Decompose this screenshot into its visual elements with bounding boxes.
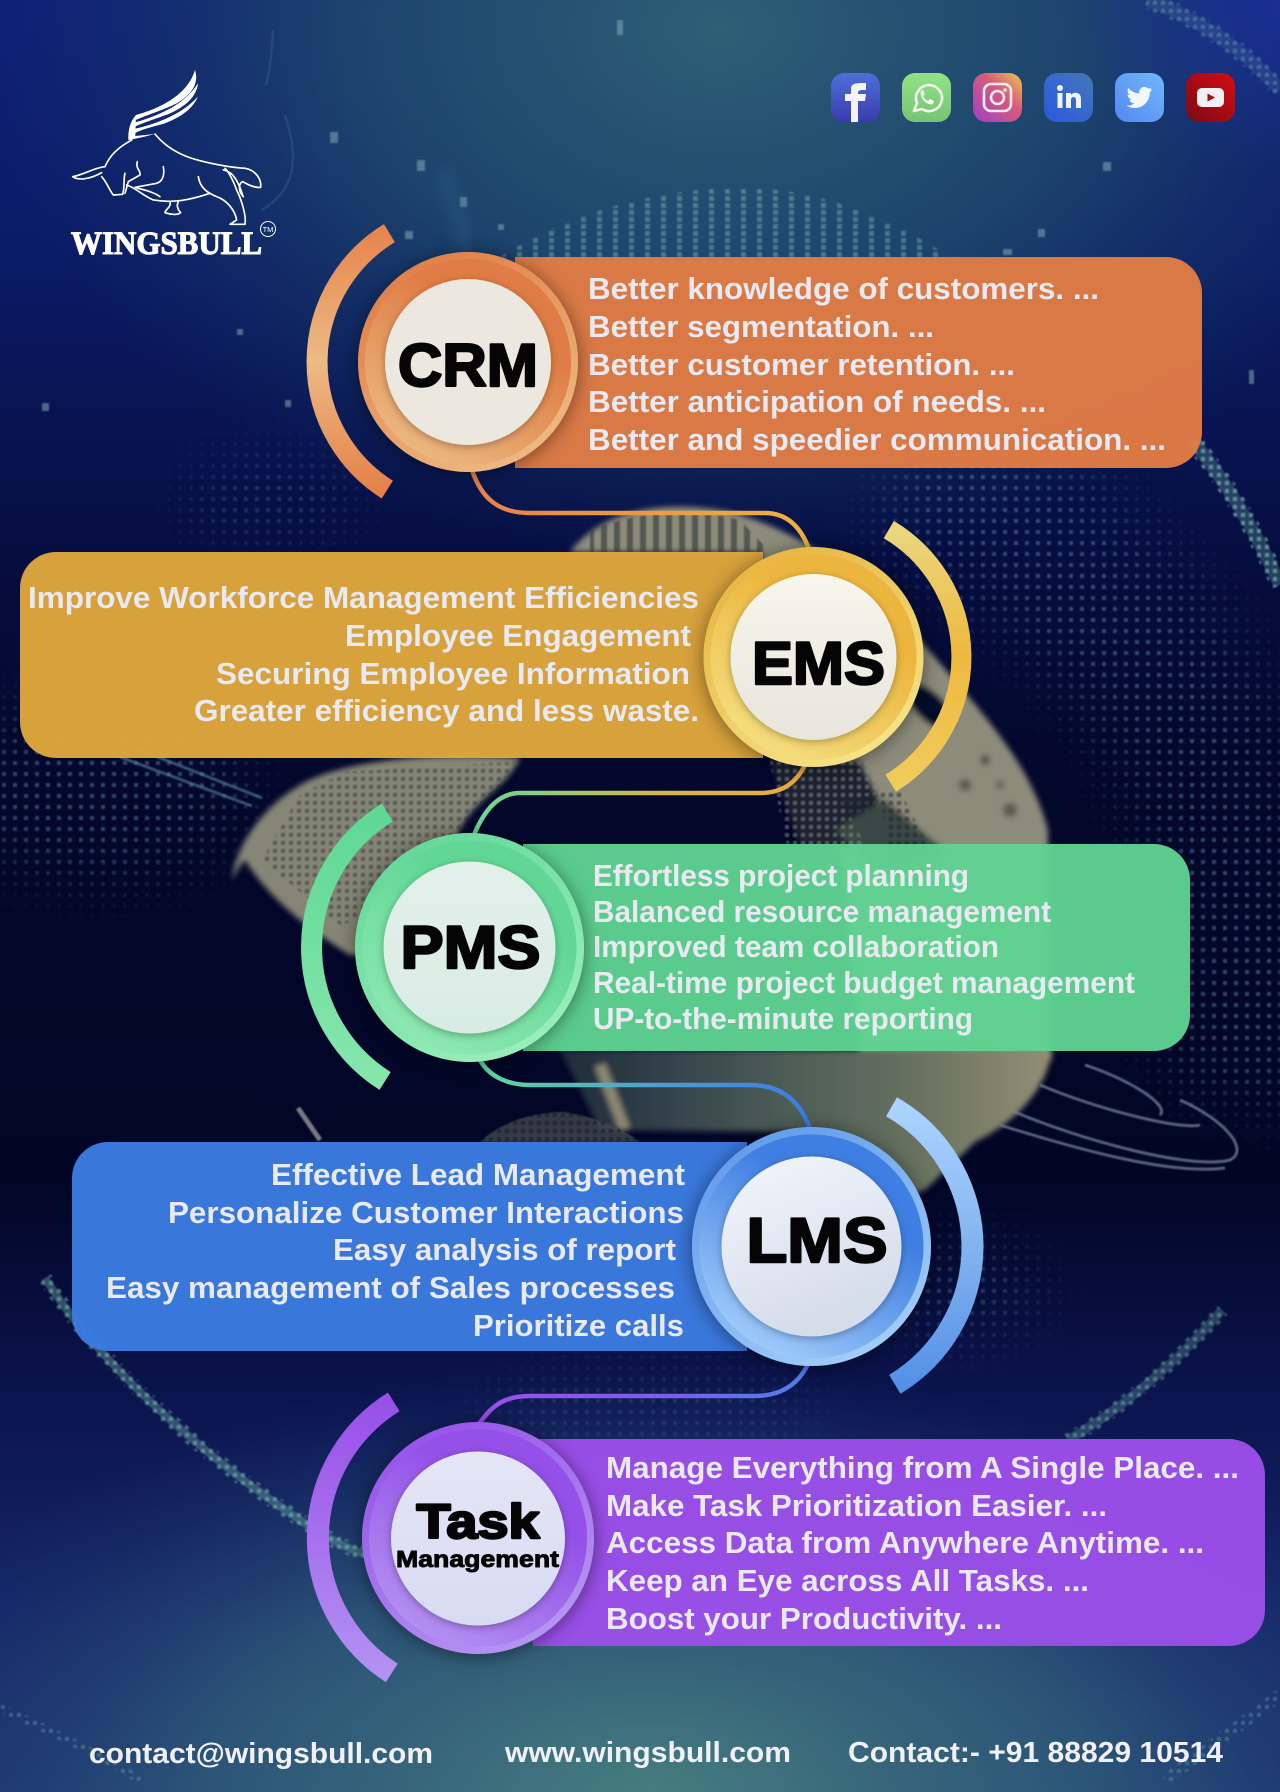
CRM circle [358, 252, 578, 472]
CRM benefits list: Better segmentation. ... [588, 310, 934, 344]
Task benefits list: Make Task Prioritization Easier. ... [606, 1489, 1107, 1523]
LMS circle [692, 1127, 931, 1366]
icon: YouTube [1186, 73, 1235, 122]
Task circle [362, 1422, 594, 1654]
LMS benefits list: Easy management of Sales processes [106, 1271, 675, 1305]
Task benefits list [606, 1451, 1239, 1636]
connector: PMS to LMS [480, 1060, 810, 1129]
CRM benefits list: Better anticipation of needs. ... [588, 385, 1046, 419]
icon: Twitter [1115, 73, 1164, 122]
EMS arc [889, 530, 961, 783]
panel: CRM [515, 257, 1202, 468]
globe land masses [232, 507, 1052, 1210]
badge: PMS [312, 812, 584, 1081]
icon: Facebook [831, 73, 880, 122]
icon: LinkedIn [1044, 73, 1093, 122]
panel: Task Management [533, 1439, 1265, 1646]
Task panel background [533, 1439, 1265, 1646]
EMS benefits list: Greater efficiency and less waste. [194, 694, 699, 728]
CRM benefits list: Better customer retention. ... [588, 348, 1015, 382]
email: contact@wingsbull.com [89, 1738, 433, 1770]
CRM arc [317, 233, 389, 490]
PMS benefits list: UP-to-the-minute reporting [593, 1002, 973, 1036]
trademark badge: TM [263, 225, 273, 234]
panel: EMS [20, 552, 763, 758]
PMS circle [355, 833, 584, 1062]
trademark badge [260, 222, 276, 236]
badge: Task Management [318, 1402, 594, 1673]
Task arc [318, 1402, 394, 1673]
Task benefits list: Manage Everything from A Single Place. ... [606, 1451, 1239, 1485]
CRM benefits list: Better knowledge of customers. ... [588, 272, 1099, 306]
PMS arc [312, 812, 387, 1081]
PMS benefits list: Balanced resource management [593, 895, 1051, 929]
LMS benefits list: Effective Lead Management [271, 1158, 685, 1192]
connector: EMS to PMS [474, 765, 805, 835]
EMS benefits list: Securing Employee Information [216, 657, 690, 691]
EMS circle [704, 547, 924, 767]
LMS benefits list: Prioritize calls [473, 1309, 684, 1343]
phone: Contact:- +91 88829 10514 [848, 1737, 1223, 1769]
EMS panel background [20, 552, 763, 758]
Task benefits list: Keep an Eye across All Tasks. ... [606, 1564, 1089, 1598]
Management label: Management [396, 1546, 559, 1572]
LMS panel background [72, 1142, 747, 1351]
PMS benefits list: Effortless project planning [593, 859, 969, 893]
PMS benefits list [593, 859, 1135, 1036]
CRM label: CRM [398, 332, 538, 399]
icon: Instagram [973, 73, 1022, 122]
panel: LMS [72, 1142, 747, 1351]
EMS benefits list [28, 581, 699, 728]
panel: PMS [523, 844, 1190, 1051]
badge: CRM [317, 233, 578, 490]
badge: LMS [692, 1107, 973, 1384]
PMS benefits list: Real-time project budget management [593, 966, 1135, 1000]
PMS benefits list: Improved team collaboration [593, 930, 999, 964]
social icons [831, 73, 1235, 122]
Task benefits list: Boost your Productivity. ... [606, 1602, 1002, 1636]
icon: winged bull [73, 70, 261, 224]
Task label: Task [416, 1496, 540, 1549]
LMS benefits list [106, 1158, 685, 1343]
connector: CRM to EMS [472, 470, 809, 549]
PMS panel background [523, 844, 1190, 1051]
CRM benefits list: Better and speedier communication. ... [588, 423, 1166, 457]
LMS label: LMS [746, 1206, 888, 1276]
EMS label: EMS [752, 630, 885, 697]
footer contact details [89, 1737, 1223, 1770]
LMS benefits list: Personalize Customer Interactions [168, 1196, 684, 1230]
badge: EMS [704, 530, 961, 783]
PMS label: PMS [400, 914, 540, 981]
EMS benefits list: Employee Engagement [345, 619, 691, 653]
Task benefits list: Access Data from Anywhere Anytime. ... [606, 1526, 1204, 1560]
CRM panel background [515, 257, 1202, 468]
wordmark: WINGSBULL [71, 226, 262, 262]
CRM benefits list [588, 272, 1166, 457]
connector: LMS to Task [479, 1364, 808, 1424]
logo: Wingsbull [71, 70, 276, 262]
EMS benefits list: Improve Workforce Management Efficiencies [28, 581, 699, 615]
LMS arc [892, 1107, 973, 1384]
icon: WhatsApp [902, 73, 951, 122]
website: www.wingsbull.com [504, 1737, 791, 1769]
LMS benefits list: Easy analysis of report [333, 1233, 676, 1267]
